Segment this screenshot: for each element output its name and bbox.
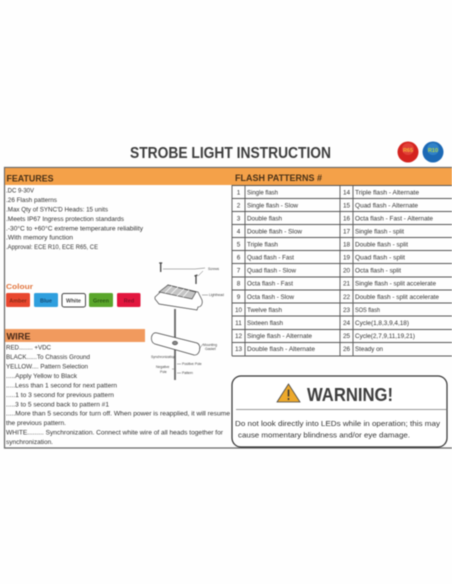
pattern numbers 1 to 13: 8	[237, 280, 241, 288]
wire header bar	[5, 329, 145, 342]
wire instructions: synchronization.	[6, 439, 53, 446]
pattern names 1 to 13	[247, 190, 315, 353]
features list: .Approval: ECE R10, ECE R65, CE	[6, 244, 99, 251]
pattern names 1 to 13: Twelve flash	[247, 307, 282, 314]
pattern numbers 14 to 26: 24	[343, 320, 350, 327]
pattern names 14 to 26: Octa flash - Fast - Alternate	[355, 216, 433, 222]
pattern numbers 14 to 26: 15	[343, 202, 350, 210]
wire instructions: WHITE......... Synchronization. Connect white wire of all heads together for	[6, 430, 224, 436]
pattern numbers 1 to 13: 6	[237, 254, 241, 262]
swatch: amber: Amber	[9, 298, 28, 304]
pattern names 1 to 13: Quad flash - Fast	[247, 254, 294, 262]
warning divider	[236, 408, 447, 410]
icon: R10 badge: R10	[428, 148, 438, 154]
pattern numbers 1 to 13: 11	[235, 320, 242, 327]
pattern numbers 14 to 26	[343, 190, 350, 353]
wire instructions: .....More than 5 seconds for turn off. When power is reapplied, it will resume	[6, 410, 230, 418]
swatch: white: White	[66, 298, 81, 304]
pattern names 14 to 26: Quad flash - split	[355, 254, 405, 262]
pattern numbers 1 to 13: 4	[237, 228, 241, 236]
heading: colour: Colour	[6, 282, 33, 291]
swatch: blue: Blue	[40, 298, 52, 304]
wire instructions	[6, 344, 230, 446]
swatch: green: Green	[93, 298, 110, 304]
wire instructions: YELLOW.... Pattern Selection	[6, 364, 88, 370]
heading: flash patterns: FLASH PATTERNS #	[235, 173, 322, 183]
pattern numbers 1 to 13: 5	[237, 242, 241, 248]
pattern names 14 to 26: Cycle(1,8,3,9,4,18)	[355, 320, 409, 327]
heading: wire: WIRE	[6, 332, 30, 342]
pattern numbers 1 to 13: 12	[235, 333, 242, 340]
pattern names 1 to 13: Single flash	[247, 190, 278, 196]
icon: R65 badge: R65	[403, 148, 413, 154]
pattern names 14 to 26	[355, 190, 439, 353]
panel: warning	[232, 376, 447, 447]
pattern numbers 14 to 26: 19	[343, 254, 350, 262]
pattern names 1 to 13: Triple flash	[247, 242, 278, 248]
wire labels: Positive Pole	[182, 362, 202, 366]
panel: wire	[5, 329, 230, 446]
pattern names 1 to 13: Octa flash - Slow	[247, 294, 294, 301]
features header bar	[5, 168, 452, 185]
wire instructions: .....Apply Yellow to Black	[6, 373, 78, 380]
wire labels: Negative	[156, 365, 169, 369]
pattern names 14 to 26: Single flash - split accelerate	[355, 280, 436, 288]
pattern numbers 1 to 13: 3	[237, 216, 241, 222]
pattern names 1 to 13: Sixteen flash	[247, 320, 283, 327]
pattern names 1 to 13: Octa flash - Fast	[247, 280, 293, 288]
wire instructions: .....1 to 3 second for previous pattern	[6, 392, 114, 399]
pattern names 1 to 13: Single flash - Slow	[247, 202, 298, 210]
features list: .DC 9-30V	[6, 188, 35, 194]
icon: R65 badge	[398, 142, 418, 162]
pattern names 1 to 13: Double flash - Alternate	[247, 346, 315, 353]
panel: features	[5, 168, 452, 251]
pattern numbers 1 to 13: 1	[237, 190, 241, 196]
heading: features: FEATURES	[6, 174, 54, 184]
pattern names 1 to 13: Single flash - Alternate	[247, 333, 312, 340]
wire instructions: BLACK......To Chassis Ground	[6, 354, 90, 361]
pattern numbers 14 to 26: 17	[343, 228, 350, 236]
features list: .Max Qty of SYNC'D Heads: 15 units	[6, 206, 109, 214]
pattern names 14 to 26: Double flash - split accelerate	[355, 294, 439, 301]
panel: colour	[6, 282, 140, 307]
lighthead: Lighthead	[209, 293, 224, 297]
wire labels: Pattern	[182, 371, 193, 375]
pattern numbers 1 to 13: 2	[237, 202, 241, 210]
mounting gasket: Gasket	[205, 347, 216, 351]
swatch: red: Red	[124, 298, 134, 304]
pole	[174, 309, 176, 380]
features list: .-30°C to +60°C extreme temperature reliability	[6, 224, 144, 232]
pattern names 1 to 13: Quad flash - Slow	[247, 268, 296, 274]
pattern numbers 14 to 26: 20	[343, 268, 350, 274]
pattern names 14 to 26: Steady on	[355, 346, 383, 353]
mounting gasket	[151, 333, 217, 355]
warning message: cause momentary blindness and/or eye damage.	[238, 430, 410, 440]
pattern numbers 1 to 13: 10	[235, 307, 242, 314]
features list: .With memory function	[6, 234, 73, 242]
warning box	[232, 376, 447, 447]
diagram: lighthead installation	[151, 263, 224, 380]
pattern numbers 14 to 26: 16	[343, 216, 350, 222]
wire instructions: RED........ +VDC	[6, 344, 51, 352]
pattern names 14 to 26: Single flash - split	[355, 228, 404, 236]
screws: Screws	[208, 267, 219, 271]
pattern numbers 1 to 13: 9	[237, 294, 241, 301]
pattern names 14 to 26: SOS flash	[355, 307, 380, 314]
pattern numbers 1 to 13: 7	[237, 268, 241, 274]
flash patterns table grid	[232, 185, 452, 356]
pattern names 14 to 26: Triple flash - Alternate	[355, 190, 419, 196]
pattern numbers 1 to 13	[235, 190, 242, 353]
pattern numbers 14 to 26: 23	[343, 307, 350, 314]
pattern numbers 14 to 26: 14	[343, 190, 350, 196]
pattern names 14 to 26: Cycle(2,7,9,11,19,21)	[355, 333, 415, 340]
wire instructions: .....3 to 5 second back to pattern #1	[6, 402, 109, 408]
pattern numbers 14 to 26: 18	[343, 242, 350, 248]
wire labels	[151, 355, 202, 375]
pattern names 1 to 13: Double flash - Slow	[247, 228, 302, 236]
wire instructions: the previous pattern.	[6, 420, 66, 427]
icon: warning triangle	[277, 384, 300, 402]
icon: R10 badge	[422, 142, 444, 162]
pattern numbers 14 to 26: 22	[343, 294, 350, 301]
pattern numbers 1 to 13: 13	[235, 346, 242, 353]
pattern names 14 to 26: Octa flash - split	[355, 268, 401, 274]
wire labels: Pole	[160, 370, 167, 374]
panel frame	[4, 168, 452, 448]
warning message	[235, 419, 440, 440]
pattern numbers 14 to 26: 26	[343, 346, 350, 353]
pattern numbers 14 to 26: 21	[343, 280, 350, 288]
wire labels: Synchronization	[151, 355, 175, 359]
panel: flash patterns	[232, 173, 452, 356]
pattern names 14 to 26: Quad flash - Alternate	[355, 202, 418, 210]
wire instructions: .....Less than 1 second for next pattern	[6, 382, 117, 390]
pattern names 1 to 13: Double flash	[247, 216, 282, 222]
pattern names 14 to 26: Double flash - split	[355, 242, 408, 248]
features list	[6, 188, 144, 251]
heading: warning: WARNING!	[307, 384, 393, 405]
warning message: Do not look directly into LEDs while in operation; this may	[235, 419, 440, 428]
pattern numbers 14 to 26: 25	[343, 333, 350, 340]
features list: .Meets IP67 Ingress protection standards	[6, 216, 125, 223]
features list: .26 Flash patterns	[6, 197, 58, 204]
mounting gasket: Mounting	[203, 343, 217, 347]
title: STROBE LIGHT INSTRUCTION	[130, 145, 331, 162]
